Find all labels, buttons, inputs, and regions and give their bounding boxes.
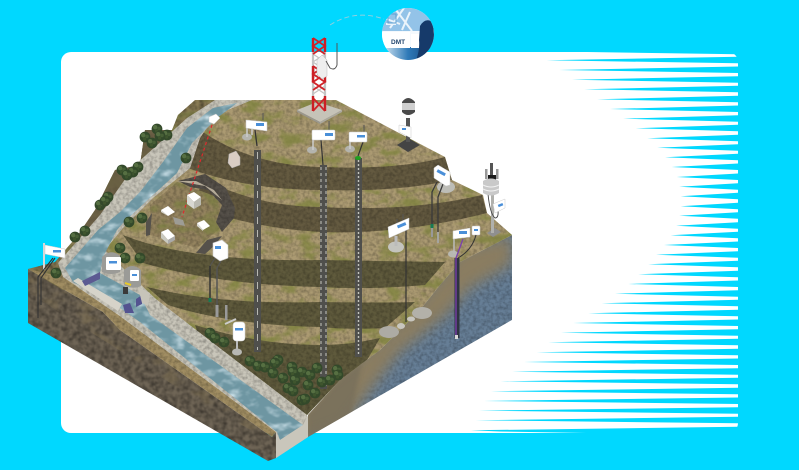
concrete water channel [58, 100, 308, 458]
weir structure with gates and sensors [73, 252, 150, 313]
sensors and purple borehole at right edge [448, 226, 480, 339]
terrace band 4 [147, 287, 415, 329]
ground probes on lower terrace [208, 266, 228, 320]
terrace band 1 [175, 130, 452, 190]
terrace ground surface [106, 100, 512, 415]
channel end wall shading [276, 415, 308, 458]
sensor: channel-top tilt box with red dashed link [182, 114, 220, 217]
sensor: small boxes on landslide [161, 151, 240, 244]
sensor: central lower terrace with long cable [388, 214, 409, 322]
trees: lower cluster [205, 328, 343, 405]
soil strip below the channel [28, 269, 276, 437]
vertical borehole strips [254, 150, 362, 389]
hillside terraces [106, 100, 512, 415]
sensor: left corner with cables [38, 243, 65, 318]
upper-left slope beside the channel [28, 100, 222, 290]
badge logo text: DMT [391, 39, 405, 46]
circular monitoring-platform badge [382, 8, 436, 60]
terrace band 2 [199, 188, 487, 232]
panel: white card with spiked right edge [61, 51, 738, 434]
sensor: top terrace middle [307, 121, 335, 165]
sensor: bottom terrace box [225, 319, 245, 356]
right rock cross-section face [308, 235, 512, 437]
trees: upper-left cluster [95, 124, 191, 227]
rock scarp and landslide [146, 174, 235, 254]
channel water [65, 103, 303, 440]
sensor: right terrace with two probes [430, 165, 455, 243]
sensor: top terrace right with green marker [345, 125, 367, 160]
sensor: top terrace left [242, 113, 267, 146]
weather station with radiation shield [483, 163, 505, 237]
dashed wireless link arc [330, 15, 384, 25]
left soil cross-section face [28, 269, 276, 461]
rain gauge mast [397, 98, 420, 152]
terrace band 3 [123, 235, 445, 288]
rock discs at cliff foot [379, 307, 432, 338]
terrace band 5 [195, 325, 380, 420]
communication tower on slab [297, 38, 342, 124]
sensor: white box on terrace with legs [210, 240, 228, 268]
trees: mid-left cluster [51, 226, 145, 278]
